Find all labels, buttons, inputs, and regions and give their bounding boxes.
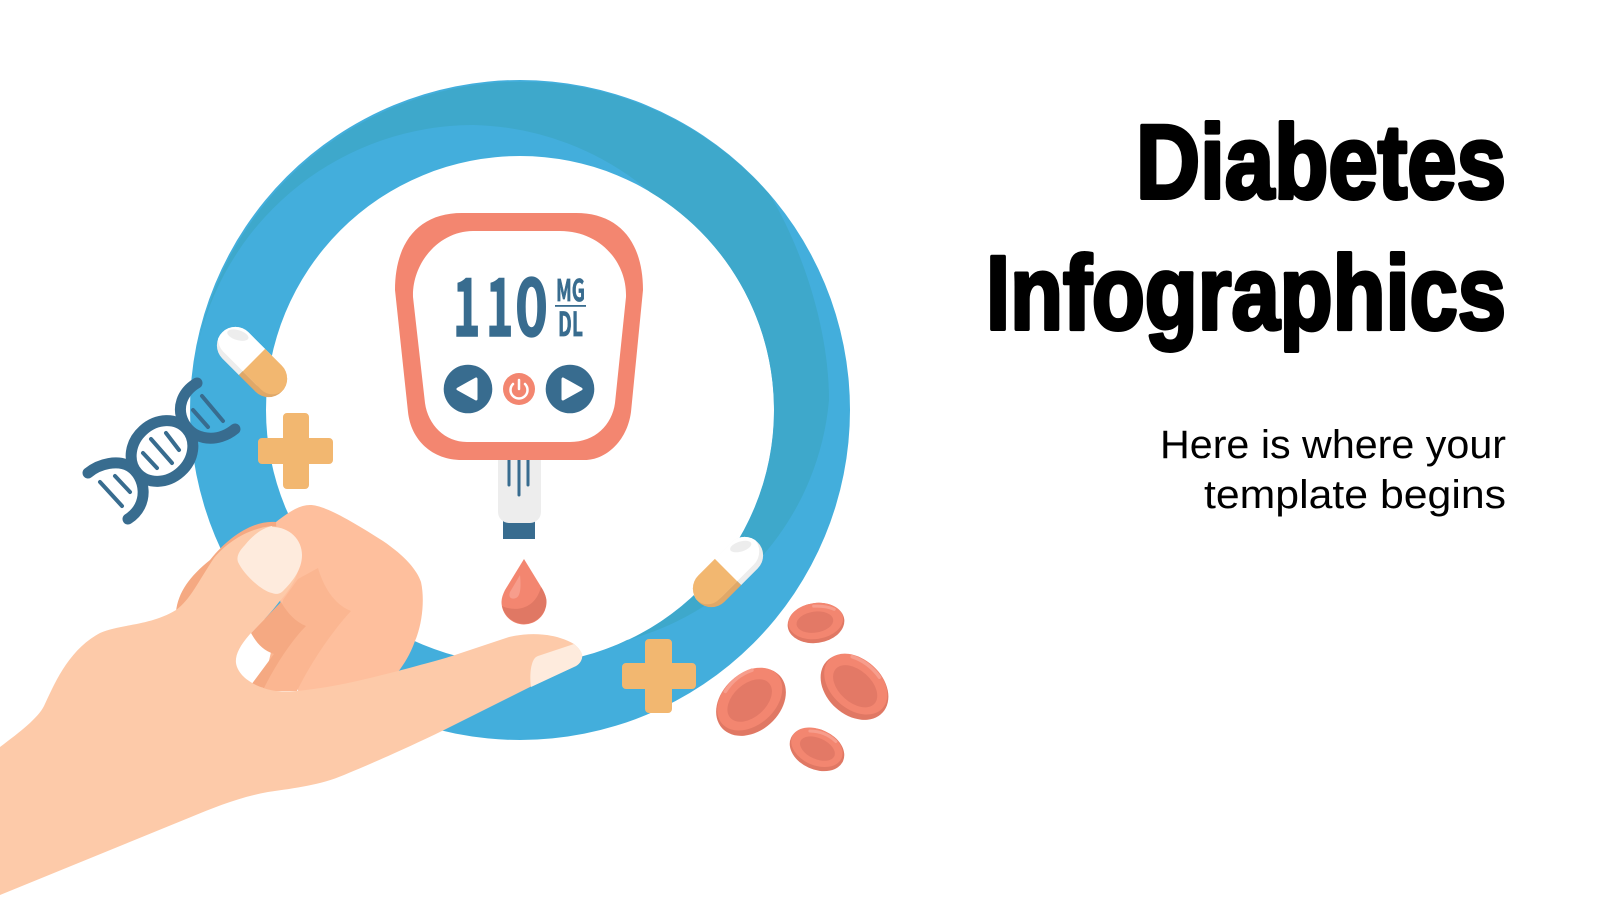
finger shadow light [262, 568, 351, 691]
title: Diabetes [1136, 104, 1506, 221]
icon: capsule left [216, 326, 288, 398]
test strip [498, 450, 541, 539]
title [986, 104, 1506, 352]
finger shadow dark [251, 602, 306, 688]
glucose meter [395, 213, 643, 539]
ring: blue circle [190, 80, 850, 740]
icon: plus left [258, 413, 333, 489]
finger behind thumb [176, 522, 292, 612]
button: right arrow [546, 365, 594, 413]
reading: 110 mg/dl: MG [556, 266, 585, 310]
icon: DNA helix [88, 383, 235, 519]
meter body [395, 213, 643, 460]
palm and index finger [0, 526, 582, 895]
icon: plus right [622, 639, 696, 713]
subtitle [1160, 423, 1506, 517]
reading: 110 mg/dl: 0 [515, 243, 548, 359]
icon: red blood cell left [703, 654, 799, 750]
icon: capsule right [692, 536, 764, 608]
reading: 110 mg/dl: 1 [453, 243, 480, 359]
hand [0, 505, 582, 895]
title: Infographics [986, 235, 1506, 352]
reading: 110 mg/dl: 1 [486, 243, 513, 359]
subtitle: template begins [1204, 473, 1506, 517]
icon: red blood cell bottom [783, 720, 851, 779]
icon: red blood cell top [785, 599, 847, 647]
button: power [503, 373, 535, 405]
curled fingers [276, 505, 423, 700]
reading: 110 mg/dl: DL [558, 298, 583, 346]
thumb nail [237, 526, 302, 594]
reading: 110 mg/dl [453, 243, 586, 359]
index finger nail [530, 644, 582, 687]
icon: red blood cell right [808, 641, 901, 733]
subtitle: Here is where your [1160, 423, 1506, 467]
button: left arrow [444, 365, 492, 413]
icon: blood drop [502, 559, 546, 624]
